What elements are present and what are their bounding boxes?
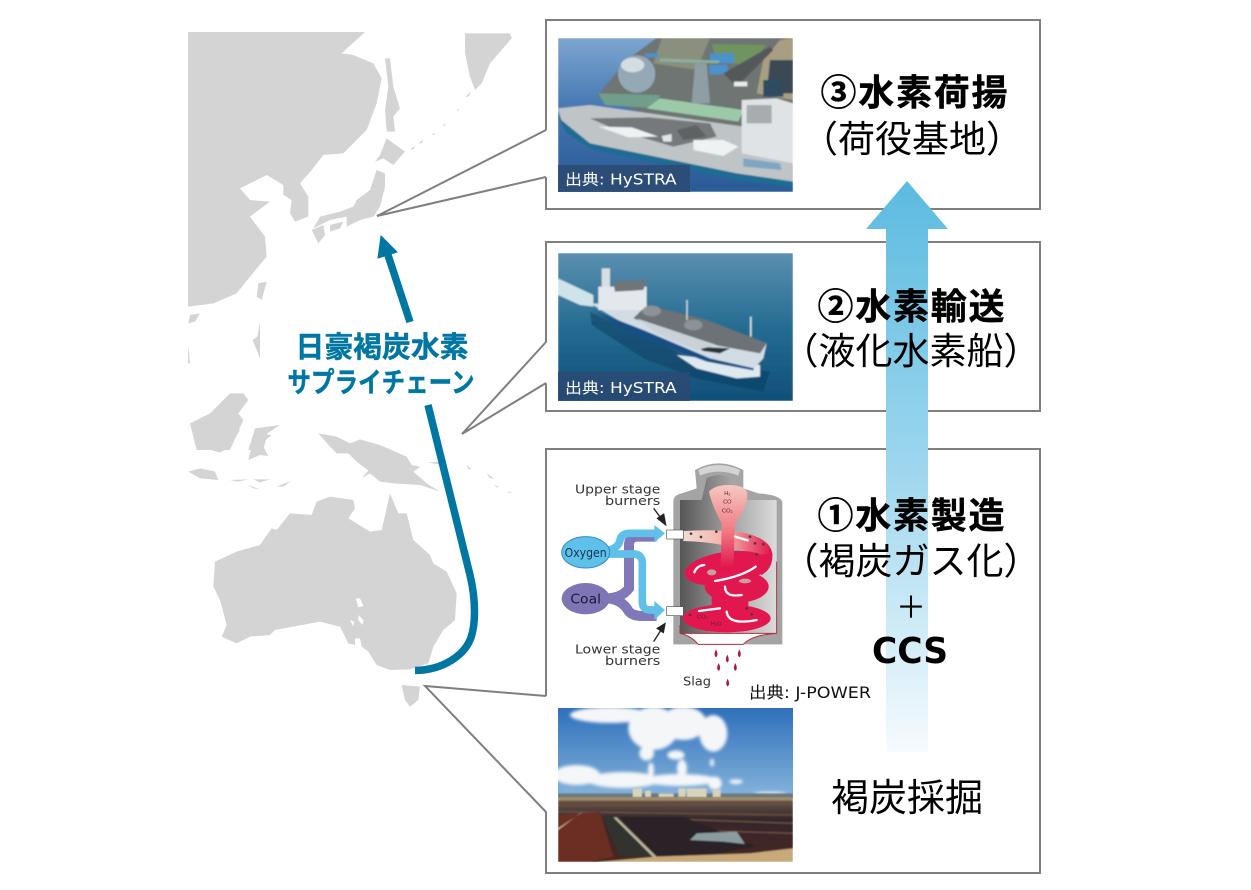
arrow: lower route from Australia	[415, 405, 474, 670]
heading: step 1: ①水素製造	[818, 495, 1004, 536]
callout pointer to ocean	[462, 342, 547, 434]
credit box: 出典: HySTRA	[565, 171, 678, 189]
supply chain label: 日豪褐炭水素	[296, 331, 468, 364]
power station	[633, 788, 721, 798]
panel: hydrogen unloading	[377, 20, 1040, 216]
map: Borneo	[190, 393, 248, 450]
map: Kamchatka	[465, 33, 512, 90]
map: Hainan	[188, 313, 200, 323]
map: Pacific islands	[427, 462, 513, 493]
panel: hydrogen transport	[462, 242, 1040, 434]
map: Indonesian islands	[188, 430, 292, 489]
map: Sakhalin	[385, 58, 400, 132]
photo: lignite mine	[553, 707, 793, 862]
coal node: Coal	[570, 592, 601, 607]
map: Asian mainland and Korea	[188, 32, 382, 307]
slag label and drops	[683, 649, 741, 688]
map: Tasmania	[402, 685, 420, 707]
diagram: two-stage gasifier	[562, 463, 782, 688]
panel: hydrogen production	[425, 449, 1040, 873]
gas tube	[709, 485, 747, 570]
supply chain label: サプライチェーン	[288, 367, 474, 398]
oxygen pipes	[608, 533, 657, 610]
lower stage burners label: burners	[605, 654, 660, 668]
flow streaks	[694, 537, 757, 622]
coal pipes	[605, 537, 657, 616]
callout pointer to Japan	[377, 130, 547, 216]
map: Kuril islands	[410, 92, 471, 149]
lower stage burners label: Lower stage	[575, 643, 660, 657]
map: New Guinea	[318, 433, 440, 492]
burner arrow heads	[654, 525, 665, 620]
gas labels: CO	[723, 500, 732, 506]
heading: step 1	[782, 495, 1040, 582]
gas labels	[697, 491, 733, 628]
callout pointer to Victoria	[425, 686, 547, 812]
coil gaps	[707, 569, 751, 583]
supply chain arrow	[378, 236, 474, 670]
source credit: J-POWER: 出典: J-POWER	[749, 683, 871, 702]
gas labels: CO₂	[697, 614, 708, 620]
supply chain label	[288, 331, 474, 398]
label: lignite mining: 褐炭採掘	[831, 778, 983, 820]
big upward arrow	[866, 181, 948, 752]
map: Oceania	[188, 430, 513, 707]
map: Australia	[213, 493, 457, 670]
flame swirl	[682, 485, 772, 632]
oxygen node	[562, 537, 610, 568]
map: East Asia	[188, 32, 512, 450]
plus sign: ＋	[896, 592, 926, 625]
slag label and drops: Slag	[683, 674, 711, 688]
particle dots	[689, 530, 765, 616]
gas labels: CO₂	[722, 508, 733, 514]
coal node	[562, 583, 610, 614]
map: Philippines	[253, 322, 260, 358]
credit box: 出典: HySTRA	[565, 379, 678, 397]
credit box	[558, 372, 690, 401]
map: Sulawesi	[248, 425, 280, 450]
burner pointer arrows	[654, 508, 666, 642]
heading: step 3	[801, 72, 1023, 160]
gas labels: H₂O	[711, 622, 722, 628]
upper stage burners label	[575, 483, 660, 508]
arrow: upper route to Japan	[378, 236, 410, 322]
gasifier vessel	[673, 463, 782, 644]
upper burner band	[683, 530, 772, 555]
upper stage burners label: burners	[605, 494, 660, 508]
photo: receiving terminal	[558, 38, 793, 192]
heading: step 3: ③水素荷揚	[820, 72, 1008, 113]
map: Taiwan	[257, 282, 267, 300]
heading: step 2	[782, 286, 1040, 372]
clouds	[553, 707, 787, 796]
coils	[682, 546, 772, 632]
credit box	[558, 165, 690, 192]
subheading: step 2: （液化水素船）	[782, 331, 1040, 372]
CCS label: CCS	[872, 631, 948, 672]
gas labels: H₂	[724, 491, 730, 497]
photo: liquefied hydrogen carrier	[558, 253, 793, 401]
heading: step 2: ②水素輸送	[818, 286, 1004, 327]
burners	[667, 530, 683, 616]
map: Japan	[312, 138, 405, 243]
oxygen node: Oxygen	[565, 546, 607, 560]
open pit	[558, 797, 793, 862]
lower stage burners label	[575, 643, 660, 668]
upper stage burners label: Upper stage	[575, 483, 660, 497]
subheading: step 1: （褐炭ガス化）	[782, 541, 1040, 582]
subheading: step 3: （荷役基地）	[801, 119, 1023, 160]
